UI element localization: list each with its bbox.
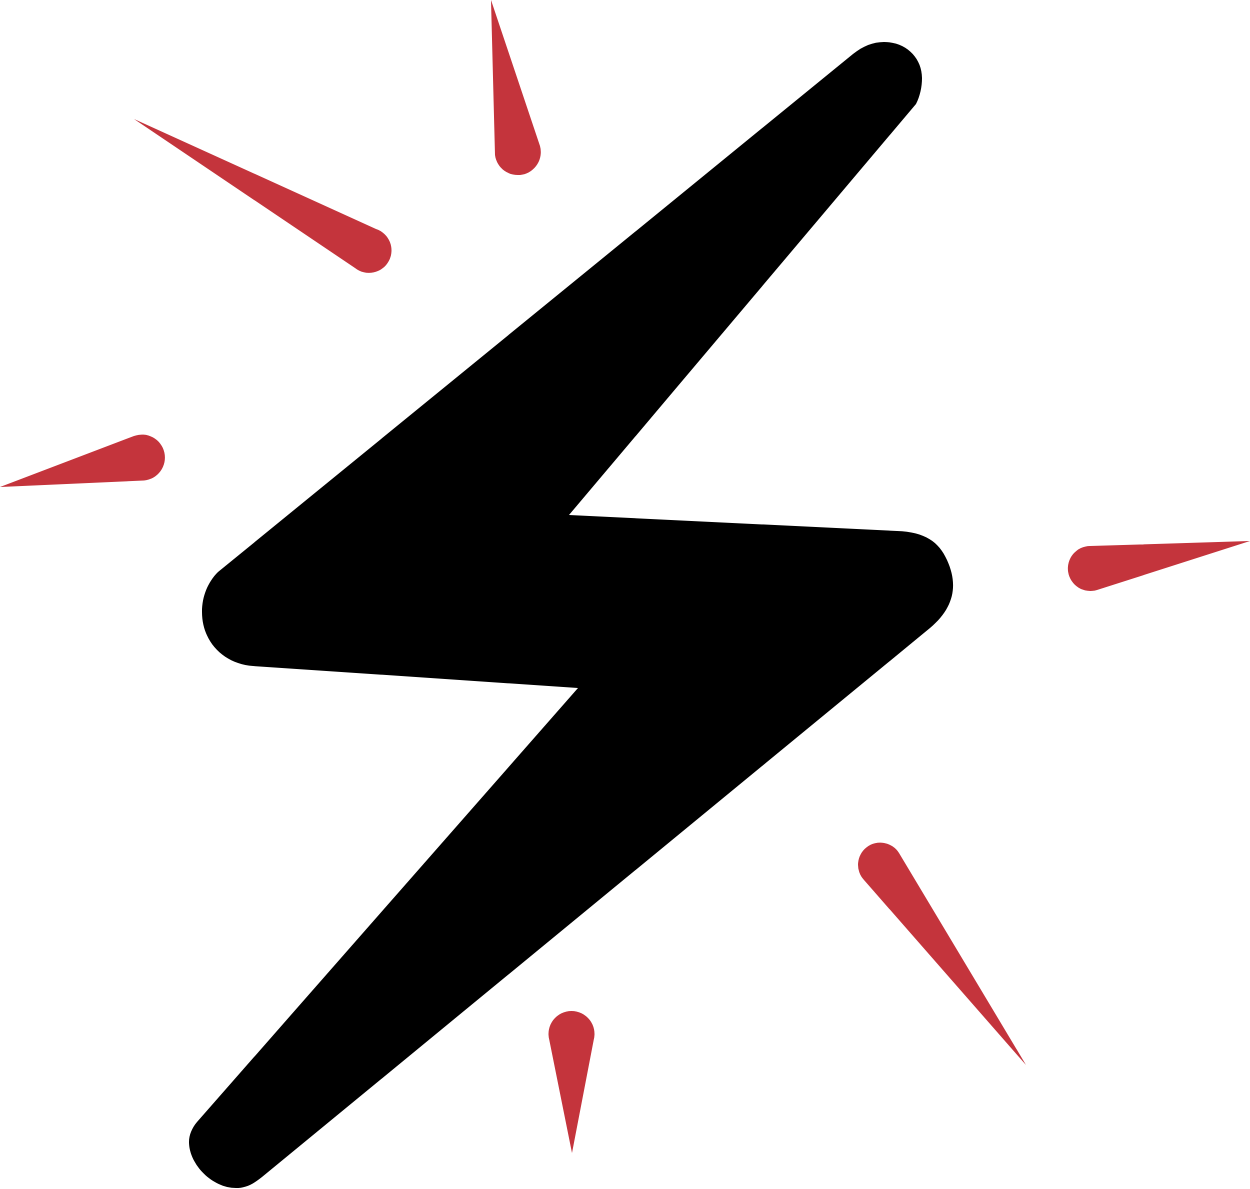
icon: red spark bottom <box>548 1011 594 1153</box>
icon: red spark left <box>0 435 165 487</box>
icon: red spark lower right <box>858 843 1026 1065</box>
icon: red spark upper left <box>134 119 391 273</box>
icon: red spark top <box>491 0 541 175</box>
icon: black lightning bolt <box>189 42 953 1188</box>
icon: red spark right <box>1068 541 1250 591</box>
